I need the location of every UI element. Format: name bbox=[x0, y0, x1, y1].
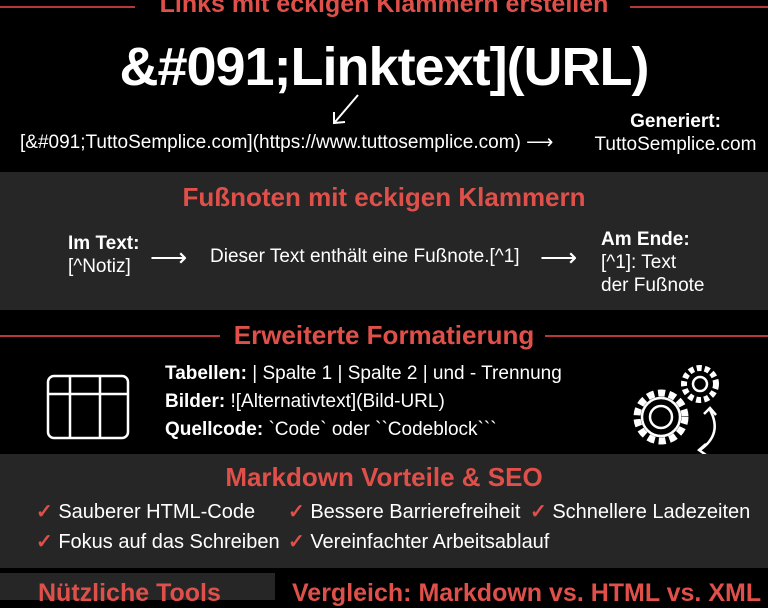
panel: formatting bbox=[0, 312, 768, 453]
end: [^1]: Text bbox=[601, 252, 676, 273]
example link: [&#091;TuttoSemplice.com](https://www.tuttosemplice.com) ⟶ bbox=[20, 132, 553, 153]
formatting list bbox=[165, 363, 562, 440]
arrow: ⟶ bbox=[540, 242, 577, 272]
heading: formatting: Erweiterte Formatierung bbox=[234, 320, 534, 350]
panel: tools bbox=[0, 573, 275, 600]
advantages col 1: ✓ Sauberer HTML-Code bbox=[36, 501, 255, 523]
formatting list: Quellcode: `Code` oder ``Codeblock``` bbox=[165, 419, 497, 440]
heading: comparison: Vergleich: Markdown vs. HTML vs. XML bbox=[292, 579, 761, 607]
panel: links bbox=[0, 0, 768, 171]
big syntax: &#091;Linktext](URL) bbox=[119, 37, 649, 97]
arrow: ⟶ bbox=[150, 242, 187, 272]
arrow: diagonal bbox=[333, 94, 359, 124]
generated: TuttoSemplice.com bbox=[595, 134, 756, 155]
formatting list: Tabellen: | Spalte 1 | Spalte 2 | und - Trennung bbox=[165, 363, 562, 384]
in text: Im Text: bbox=[68, 233, 139, 254]
in text bbox=[68, 233, 139, 277]
generated bbox=[594, 111, 756, 155]
icon: table bbox=[46, 374, 130, 440]
advantages col 2 bbox=[288, 501, 550, 553]
panel: advantages bbox=[0, 454, 768, 568]
end bbox=[601, 229, 704, 296]
panel: footnotes bbox=[0, 172, 768, 310]
end: Am Ende: bbox=[601, 229, 690, 250]
in text: [^Notiz] bbox=[68, 256, 131, 277]
advantages col 1 bbox=[36, 501, 280, 553]
heading: tools: Nützliche Tools bbox=[38, 579, 221, 607]
heading: advantages: Markdown Vorteile & SEO bbox=[225, 462, 543, 492]
advantages col 1: ✓ Fokus auf das Schreiben bbox=[36, 531, 280, 553]
icon: gears bbox=[634, 365, 719, 454]
advantages col 2: ✓ Vereinfachter Arbeitsablauf bbox=[288, 531, 549, 553]
generated: Generiert: bbox=[630, 111, 721, 132]
end: der Fußnote bbox=[601, 275, 704, 296]
advantages col 3: ✓ Schnellere Ladezeiten bbox=[530, 501, 750, 523]
formatting list: Bilder: ![Alternativtext](Bild-URL) bbox=[165, 391, 445, 412]
heading: footnotes: Fußnoten mit eckigen Klammern bbox=[182, 182, 586, 212]
example sentence: Dieser Text enthält eine Fußnote.[^1] bbox=[210, 246, 520, 267]
advantages col 2: ✓ Bessere Barrierefreiheit bbox=[288, 501, 520, 523]
